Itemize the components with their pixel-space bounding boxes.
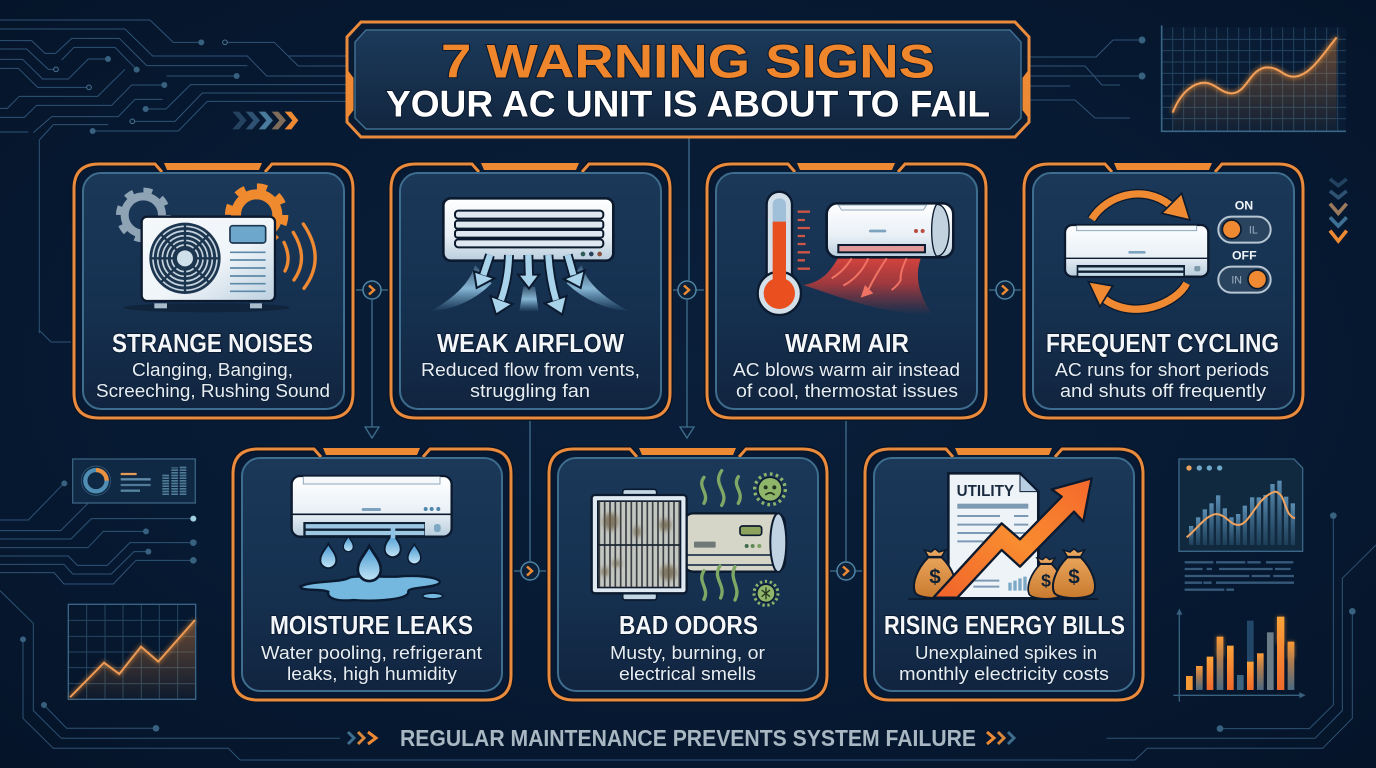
panel: bad odors <box>549 448 827 700</box>
footer <box>348 725 1014 751</box>
heading: WARM AIR <box>785 328 909 358</box>
mini bars <box>166 467 183 495</box>
panel: weak airflow <box>391 163 670 418</box>
circuit trace to first card <box>39 330 73 342</box>
heading: RISING ENERGY BILLS <box>884 610 1125 640</box>
description: electrical smells <box>619 663 756 684</box>
description <box>261 642 482 684</box>
chevrons right <box>987 732 1014 744</box>
connector node <box>996 281 1014 299</box>
chevrons left <box>348 732 376 744</box>
connector lines between cards <box>353 137 1024 571</box>
connector node <box>363 281 381 299</box>
description <box>733 359 960 401</box>
icon: thermometer and warm air <box>758 192 953 315</box>
line chart top right <box>1162 25 1346 131</box>
money bag middle: $ <box>1041 570 1051 590</box>
description <box>610 642 765 684</box>
connector node <box>678 281 696 299</box>
title line 1: 7 WARNING SIGNS <box>441 34 935 88</box>
description <box>1055 359 1269 401</box>
money bag right: $ <box>1068 565 1080 588</box>
panel: rising energy bills <box>865 448 1143 700</box>
footer message: REGULAR MAINTENANCE PREVENTS SYSTEM FAILURE <box>400 725 976 751</box>
description: monthly electricity costs <box>899 663 1109 684</box>
description: leaks, high humidity <box>287 663 458 684</box>
description: Water pooling, refrigerant <box>261 642 482 663</box>
circuit traces top left <box>0 20 347 333</box>
description: Unexplained spikes in <box>915 642 1097 663</box>
heading: WEAK AIRFLOW <box>437 328 624 358</box>
money bag middle <box>1028 557 1064 599</box>
panel: frequent cycling <box>1024 163 1303 418</box>
description: Screeching, Rushing Sound <box>96 380 330 401</box>
donut gauge <box>81 466 111 495</box>
heading: STRANGE NOISES <box>112 328 313 358</box>
icon: cycling unit with switches: IL <box>1249 225 1258 237</box>
header banner <box>347 22 1029 137</box>
money bag right <box>1053 549 1095 598</box>
description <box>96 359 330 401</box>
icon: cycling unit with switches: ON <box>1235 198 1253 212</box>
bar chart right <box>1173 608 1306 702</box>
icon: weak airflow unit <box>430 198 630 315</box>
bars <box>1189 481 1295 545</box>
chevrons right <box>1330 179 1347 241</box>
dashboard widget bottom left <box>73 459 195 503</box>
description: of cool, thermostat issues <box>736 380 958 401</box>
heading: MOISTURE LEAKS <box>270 610 473 640</box>
description: Musty, burning, or <box>610 642 765 663</box>
description <box>421 359 640 401</box>
description: AC blows warm air instead <box>733 359 960 380</box>
heading: BAD ODORS <box>619 610 758 640</box>
description: AC runs for short periods <box>1055 359 1269 380</box>
icon: utility bill with rising arrow <box>908 473 1098 599</box>
description: struggling fan <box>470 380 590 401</box>
connector node <box>837 562 855 580</box>
icon: cycling unit with switches <box>1065 193 1271 309</box>
icon: dirty filter and unit <box>592 471 786 605</box>
icon: leaking unit <box>292 476 452 601</box>
title line 2: YOUR AC UNIT IS ABOUT TO FAIL <box>386 84 990 124</box>
money bag left: $ <box>929 565 941 588</box>
circuit traces bottom left <box>0 480 340 760</box>
icon: noisy outdoor unit <box>119 187 315 312</box>
money bag left <box>914 549 956 598</box>
description: and shuts off frequently <box>1060 380 1267 401</box>
description <box>899 642 1109 684</box>
description: Clanging, Banging, <box>132 359 293 380</box>
circuit traces bottom right <box>1107 512 1376 760</box>
circuit traces top right <box>1030 36 1146 118</box>
legend lines <box>121 470 137 477</box>
icon: cycling unit with switches: IN <box>1231 274 1242 286</box>
chart panel right <box>1179 459 1303 590</box>
panel: warm air <box>707 163 986 418</box>
text lines <box>1185 562 1294 590</box>
heading: FREQUENT CYCLING <box>1046 328 1279 358</box>
icon: utility bill with rising arrow: UTILITY <box>957 483 1014 500</box>
description: Reduced flow from vents, <box>421 359 640 380</box>
line chart bottom left <box>68 604 196 699</box>
chevrons top left <box>232 112 298 129</box>
panel: strange noises <box>74 163 353 418</box>
banner frame <box>347 22 1029 137</box>
icon: cycling unit with switches: OFF <box>1232 249 1257 263</box>
connector node <box>521 562 539 580</box>
bottom circuit trace <box>240 759 1135 761</box>
panel: moisture leaks <box>233 448 511 700</box>
